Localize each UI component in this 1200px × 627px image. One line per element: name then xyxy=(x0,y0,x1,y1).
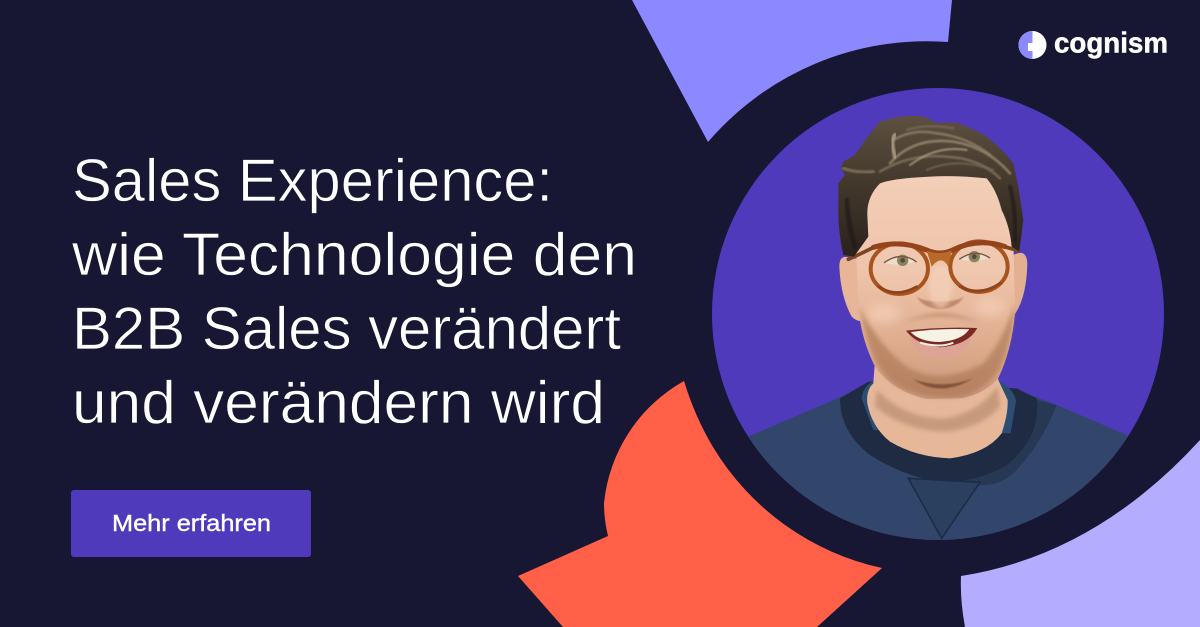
button xyxy=(71,490,311,557)
title: wie Technologie den xyxy=(71,221,637,288)
portrait of man xyxy=(748,116,1127,557)
stubble xyxy=(860,303,1015,398)
shape: lower right lilac xyxy=(961,440,1200,627)
shape: coral xyxy=(518,381,882,627)
ears xyxy=(839,256,860,321)
portrait circle xyxy=(712,88,1164,540)
title: und verändern wird xyxy=(72,369,605,436)
cheek glow xyxy=(867,303,900,323)
collar xyxy=(840,382,1037,482)
button label: Mehr erfahren xyxy=(112,510,271,536)
undershirt xyxy=(862,381,1016,433)
shape: top lavender xyxy=(632,0,952,142)
glasses xyxy=(848,241,1018,294)
title: Sales Experience: xyxy=(72,147,553,214)
nose xyxy=(917,297,964,309)
head xyxy=(838,116,1027,399)
eyes xyxy=(884,251,990,266)
logo icon xyxy=(1018,31,1046,59)
logo wordmark: cognism xyxy=(1054,28,1168,60)
neck xyxy=(867,360,1008,458)
title xyxy=(71,147,637,436)
hair xyxy=(838,116,1023,257)
logo xyxy=(1018,28,1168,60)
face xyxy=(855,172,1015,399)
sweater xyxy=(748,366,1127,540)
title: B2B Sales verändert xyxy=(72,295,621,362)
chest triangle xyxy=(908,478,980,538)
mouth xyxy=(906,328,977,358)
